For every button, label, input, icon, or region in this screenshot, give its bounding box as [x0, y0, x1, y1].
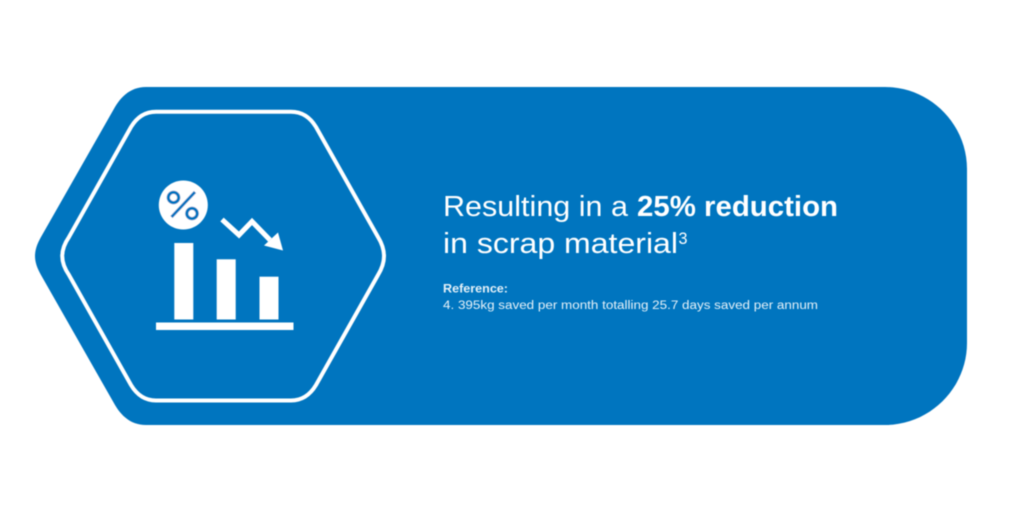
inner hexagon outline	[62, 112, 384, 400]
heading: 3	[678, 230, 688, 248]
chart baseline	[156, 322, 294, 330]
icon: falling bar chart with percent badge	[156, 180, 294, 330]
icon: percent badge	[159, 180, 208, 230]
heading: 25% reduction	[637, 191, 838, 223]
reference note: Reference:	[443, 284, 508, 296]
heading	[443, 191, 838, 260]
reference note: 4. 395kg saved per month totalling 25.7 days saved per annum	[443, 300, 818, 312]
reference note	[443, 284, 818, 312]
heading: Resulting in a	[443, 191, 629, 223]
bar: tallest	[174, 243, 193, 320]
panel: blue hexagon-tab banner	[35, 87, 967, 425]
arrow: downward trend	[222, 220, 283, 250]
bar: shortest	[260, 277, 278, 320]
heading: in scrap material	[443, 228, 678, 260]
bar: middle	[217, 259, 236, 320]
